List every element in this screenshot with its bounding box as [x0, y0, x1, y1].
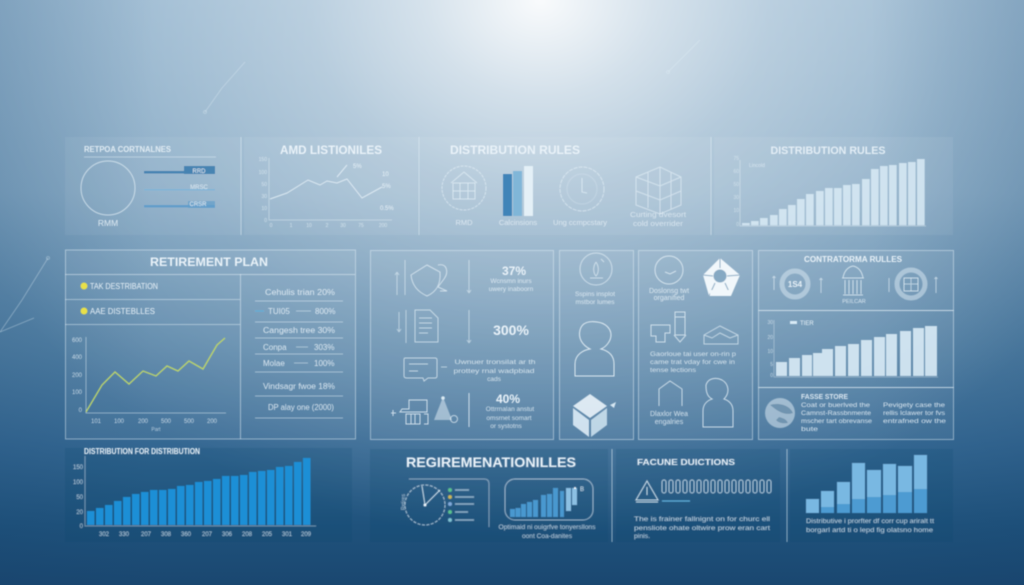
panel: distribution rules bar chart: 50 — [733, 182, 739, 188]
panel: tier bar chart: 0 — [770, 373, 773, 379]
icon: bars — [499, 166, 537, 227]
panel: distribution stacked bars — [790, 449, 953, 542]
caption — [806, 518, 934, 534]
icon: box — [573, 394, 616, 437]
donut right — [889, 270, 938, 298]
icon: house outline — [659, 381, 682, 406]
list of rates: 800% — [315, 307, 335, 316]
stat 40 percent: omsrnet somart — [486, 415, 532, 422]
panel: retirement contributions — [65, 137, 240, 235]
text block: pensliote ohate oltwire prow eran cart — [634, 525, 770, 532]
icon: target circle — [580, 253, 612, 285]
icon: wireframe cube — [630, 167, 686, 228]
text: fasse score: Pevigety case the — [883, 402, 945, 409]
panel: AMD line chart — [244, 137, 418, 235]
icon: person outline — [703, 378, 733, 427]
line chart: 30 — [340, 223, 346, 229]
panel: distribution bar chart: 20 — [76, 510, 84, 516]
icon: globe — [765, 398, 795, 428]
panel: distribution bar chart: 308 — [161, 532, 172, 538]
icon: person — [575, 322, 614, 376]
donut left — [772, 271, 822, 297]
network accent lines — [0, 40, 700, 332]
line chart: 75 — [358, 223, 364, 229]
heading: distribution for distribution: DISTRIBUTION FOR DISTRIBUTION — [84, 447, 200, 456]
panel: engine icons column: organified — [654, 295, 684, 302]
line chart: retirement: 600 — [72, 338, 83, 344]
icon: clock — [655, 256, 683, 284]
caption: Doslonsg twt — [649, 288, 689, 295]
list of rates: Cangesh tree 30% — [263, 326, 335, 335]
panel: distribution bar chart: 205 — [262, 532, 273, 538]
panel: tier bar chart: 10 — [767, 349, 773, 355]
panel: distribution bar chart: 360 — [181, 532, 192, 538]
stat 300 percent: 300% — [493, 322, 529, 338]
panel: distribution rules bar chart: Lincold — [749, 163, 765, 169]
line chart: 10 — [306, 223, 312, 229]
line chart: 2 — [326, 223, 329, 229]
caption: Gaorloue tai user on-rin p — [650, 351, 736, 358]
text block: pinis. — [634, 533, 650, 540]
progress bars: RRD — [192, 169, 206, 175]
text: fasse score: entrafned ow the — [883, 418, 946, 425]
list of rates: 303% — [314, 343, 334, 352]
list of rates: Conpa — [263, 343, 287, 352]
panel: facune dulictions — [616, 449, 780, 542]
progress bars: CRSR — [189, 202, 207, 208]
icon: RMD circle — [81, 161, 135, 228]
icon: house in circle — [442, 166, 486, 227]
panel: distribution rules bar chart: 60 — [733, 169, 739, 175]
line chart: 150 — [259, 157, 267, 163]
line chart: 10 — [382, 172, 389, 178]
legend: tax distribution: TAK DESTRIBATION — [90, 282, 158, 291]
callout text: cads — [487, 376, 502, 383]
list of rates: 100% — [314, 359, 334, 368]
panel: distribution bar chart: 301 — [282, 532, 293, 538]
line chart: retirement: 0 — [79, 408, 83, 414]
panel: distribution rules icons — [420, 137, 710, 235]
icon: house in circle: RMD — [455, 218, 473, 227]
caption: borgarl artd ti o lepd fig olatsno home — [806, 527, 933, 534]
gauge and legend: Retires — [401, 494, 407, 510]
progress bars — [144, 166, 215, 208]
panel: distribution bar chart: 207 — [141, 532, 152, 538]
line chart: 200 — [379, 223, 387, 229]
stat 37 percent: uwery inaboorn — [489, 286, 534, 293]
icon: RMD circle: RMM — [98, 218, 118, 228]
icon row — [662, 480, 771, 493]
list of rates: DP alay one (2000) — [268, 403, 334, 412]
heading: retirement plan: RETIREMENT PLAN — [150, 255, 268, 269]
panel: tier bar chart: 20 — [767, 335, 773, 341]
text block: The is frainer fallnignt on for churc ell — [634, 516, 771, 523]
caption: came trat vday for cwe in — [650, 359, 735, 366]
panel: distribution rules bar chart: 10 — [733, 208, 739, 214]
callout text: Uwnuer tronsilat ar th — [454, 359, 536, 366]
panel: distribution bar chart: 50 — [76, 495, 84, 501]
icon: clock — [553, 167, 607, 227]
stat 37 percent: 37% — [502, 264, 526, 278]
panel: advisor column: mstbor lumes — [575, 299, 615, 306]
panel: engine icons column: engalries — [655, 419, 684, 426]
bars — [776, 326, 937, 376]
legend: AAE distribution: AAE DISTEBLLES — [90, 307, 155, 316]
panel: tier bar chart: 30 — [767, 320, 773, 326]
line chart: retirement: 500 — [161, 419, 172, 425]
caption: Optimaid ni ouigrfve tonyersllons — [498, 525, 596, 531]
caption: tense lections — [650, 367, 697, 374]
stat 40 percent: or systotns — [490, 423, 522, 430]
panel: distribution bar chart: 306 — [222, 532, 233, 538]
text: fasse score: Camnst-Rassbnmente — [801, 410, 871, 417]
line chart: 50 — [261, 182, 267, 188]
stacked bars — [806, 455, 927, 513]
text: fasse score: bute — [801, 426, 818, 433]
panel: distribution bar chart: 209 — [301, 532, 312, 538]
text: fasse score — [801, 394, 946, 433]
line chart: retirement: 200 — [138, 419, 149, 425]
text: fasse score: Coat or buerlved the — [801, 402, 870, 409]
line chart: retirement: 101 — [91, 419, 102, 425]
list of rates: Molae — [263, 359, 285, 368]
panel: distribution rules bar chart — [714, 137, 953, 235]
icon: bars: Calcinsions — [499, 218, 537, 227]
panel: distribution rules bar chart: 75 — [733, 156, 739, 162]
icon: tent — [704, 326, 738, 344]
panel: distribution bar chart: 0 — [80, 524, 84, 530]
panel: distribution rules bar chart: 0 — [736, 222, 739, 228]
warning icon — [636, 481, 658, 502]
donut left: 1S4 — [788, 280, 803, 289]
line chart: retirement: 100 — [72, 390, 83, 396]
icon: bank: PEILCAR — [842, 299, 866, 305]
line chart: retirement: 500 — [184, 419, 195, 425]
gauge and legend — [401, 479, 489, 527]
rounded bar chart: B — [580, 487, 584, 493]
heading: contratorma rules: CONTRATORMA RULLES — [804, 255, 903, 264]
panel: retirement plan — [65, 250, 356, 439]
heading: distribution rules chart: DISTRIBUTION RULES — [770, 145, 886, 157]
icon: wireframe cube: cold overrider — [633, 221, 684, 228]
heading: retirement contributions: RETPOA CORTNALNES — [84, 145, 172, 154]
panel: fasse score — [758, 388, 954, 440]
icon: bank — [842, 266, 866, 305]
panel: distribution bar chart: 100 — [73, 480, 84, 486]
line chart: 0.5% — [380, 206, 394, 212]
panel: tier bar chart: 5 — [770, 362, 773, 368]
line chart: retirement: 200 — [207, 419, 218, 425]
panel: key statistics — [370, 250, 554, 440]
icon: wireframe cube: Curting dvesort — [630, 212, 686, 219]
line chart: 1 — [290, 223, 293, 229]
caption — [650, 351, 736, 374]
panel: contratorma rules — [758, 250, 954, 310]
line chart: 100 — [259, 170, 267, 176]
icon: tools — [651, 312, 686, 342]
heading: facune: FACUNE DUICTIONS — [637, 457, 735, 467]
panel: distribution bar chart — [65, 447, 352, 542]
caption: Dlaxlor Wea — [650, 411, 688, 418]
text: fasse score: FASSE STORE — [801, 394, 848, 401]
bars — [87, 458, 310, 525]
caption: Sspins insplot — [575, 291, 615, 298]
icon: pentagon — [703, 258, 740, 296]
list of rates: Vindsagr fwoe 18% — [263, 382, 335, 391]
line chart: 0 — [270, 223, 273, 229]
panel: tier bar chart — [758, 310, 954, 388]
list of rates: TUI05 — [268, 307, 290, 316]
stat 300 percent — [397, 310, 529, 343]
caption — [498, 525, 596, 540]
panel: engine icons column — [638, 250, 752, 440]
list of rates: Cehulis trian 20% — [265, 288, 335, 297]
progress bars: MRSC — [190, 185, 208, 191]
heading: regirementationilles: REGIREMENATIONILLES — [406, 454, 576, 470]
panel: distribution bar chart: 207 — [202, 532, 213, 538]
caption: Distributive i prorfter df corr cup ariralt tt — [806, 518, 934, 525]
heading: distribution rules: DISTRIBUTION RULES — [450, 145, 580, 157]
panel: distribution bar chart: 150 — [73, 465, 84, 471]
line chart — [259, 157, 394, 229]
line chart: 10 — [261, 206, 267, 212]
line chart: 30 — [261, 194, 267, 200]
list of rates — [255, 288, 343, 418]
line chart: retirement: 100 — [114, 419, 125, 425]
panel: distribution bar chart: 330 — [119, 532, 130, 538]
line chart: 5% — [382, 184, 391, 190]
text: fasse score: mscher tart obrevanse — [801, 418, 872, 425]
panel: advisor column — [560, 250, 634, 440]
line chart: 0 — [264, 218, 267, 224]
text block — [634, 516, 771, 540]
icon: clock: Ung ccmpcstary — [553, 218, 607, 227]
panel: regirementationilles — [370, 449, 608, 542]
stat 37 percent — [395, 260, 534, 296]
stat 37 percent: Wcnsmn inurs — [490, 278, 532, 285]
panel: distribution bar chart: 302 — [99, 532, 110, 538]
text: fasse score: rellis lclawer tor fvs — [883, 410, 946, 417]
callout text — [404, 358, 536, 383]
line chart: retirement — [72, 337, 226, 433]
caption: oont Coa-danites — [522, 534, 572, 540]
heading: AMD: AMD LISTIONILES — [280, 145, 382, 157]
rounded bar chart — [505, 479, 593, 520]
panel: tier bar chart: TIER — [800, 321, 814, 327]
line chart: retirement: Part — [151, 427, 161, 433]
callout text: prottey rnal wadpbiad — [454, 368, 535, 375]
line chart: 5% — [353, 164, 362, 170]
panel: distribution rules bar chart: 30 — [733, 195, 739, 201]
stat 40 percent: Ottrrnalan anstut — [486, 406, 534, 413]
stat 40 percent: 40% — [496, 392, 520, 406]
stat 40 percent — [391, 392, 534, 430]
line chart: retirement: 200 — [72, 373, 83, 379]
panel: distribution bar chart: 208 — [242, 532, 253, 538]
line chart: retirement: 400 — [72, 355, 83, 361]
bar chart — [742, 159, 925, 225]
